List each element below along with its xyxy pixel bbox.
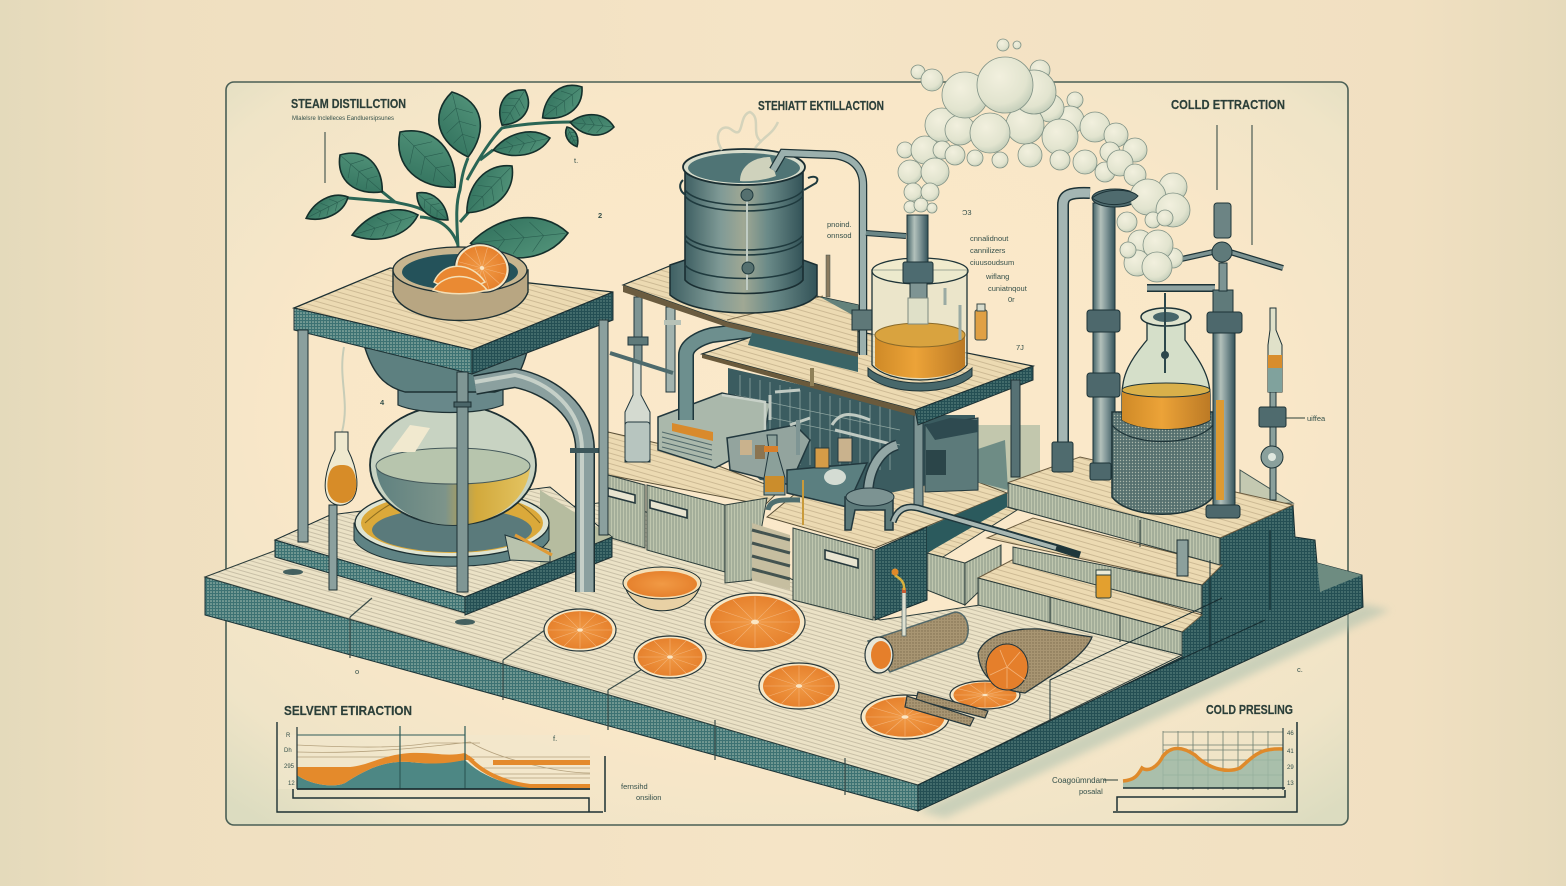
small figure labels: [355, 156, 1326, 743]
connecting pipe: [773, 153, 863, 355]
drain pipe: [893, 507, 1080, 555]
annotations near the jar: 0r: [1008, 295, 1015, 304]
pump: [845, 488, 894, 530]
heading: cold extraction: COLLD ETTRACTION: [1171, 97, 1285, 112]
heading: cold pressing: COLD PRESLING: [1206, 702, 1293, 717]
top step: [1007, 457, 1293, 565]
curved pipe: [868, 445, 897, 495]
chart notes: cold pressing: posalal: [1079, 787, 1103, 796]
support post: [914, 412, 923, 507]
large steel pot: [670, 149, 817, 313]
annotations near the jar: 7J: [1016, 343, 1024, 352]
callout leader lines: [325, 125, 1252, 245]
chart notes: solvent extraction: R: [286, 733, 291, 739]
control console: [658, 393, 770, 468]
annotations near the jar: wiflang: [985, 272, 1009, 281]
chart notes: solvent extraction: [284, 733, 661, 802]
low step: [978, 560, 1202, 655]
wall behind the machinery: [975, 425, 1040, 500]
small side block: [927, 505, 1017, 605]
stepped platform: stone steps: [927, 457, 1293, 655]
annotations near the jar: [827, 208, 1028, 352]
upper shelf: [623, 265, 858, 357]
steam collar on column: [1092, 190, 1138, 205]
thin left pipe: [1052, 193, 1090, 472]
left table with flask: [275, 268, 613, 625]
middle step: [987, 518, 1222, 613]
small figure labels: c.: [1297, 665, 1303, 674]
glass flask with oil: [1122, 288, 1215, 429]
small figure labels: 4: [380, 398, 385, 407]
panel: framed diagram area: [226, 82, 1348, 825]
speckled cylinder: [1112, 412, 1213, 514]
chart notes: solvent extraction: onsilion: [636, 793, 661, 802]
top ledge on teal side: [1317, 563, 1362, 592]
annotations near the jar: cnnalidnout: [970, 234, 1009, 243]
small vial: [975, 304, 987, 340]
side pipe: [475, 378, 585, 592]
side cabinet: [925, 418, 978, 492]
bottle on stand: [625, 360, 650, 462]
small flask: [325, 347, 357, 505]
orange bottle: [764, 435, 785, 495]
annotations near the jar: Ɔ3: [962, 208, 972, 217]
stems: [348, 122, 572, 247]
heading: solvent extraction: SELVENT ETIRACTION: [284, 703, 412, 718]
short post: [826, 255, 830, 297]
chart notes: cold pressing: 46: [1287, 731, 1294, 737]
rind strips: [905, 692, 988, 726]
thick column: [1087, 189, 1138, 480]
heating ring: [354, 489, 549, 566]
label line: [1286, 417, 1305, 419]
wisps of steam above the pot: [718, 112, 778, 150]
half slice: [623, 567, 701, 611]
table leg: [1011, 380, 1020, 477]
chart notes: cold pressing: 13: [1287, 781, 1294, 787]
small side column: [1259, 308, 1286, 500]
chart notes: solvent extraction: fernsihd: [621, 782, 648, 791]
orange slices on the platform: [544, 567, 1020, 739]
cone of rind: [978, 629, 1092, 693]
small teal side seams: [1050, 530, 1270, 720]
round flask: [370, 405, 536, 525]
glassware tray: [727, 390, 870, 485]
heading: steam distillation: STEAM DISTILLCTION: [291, 96, 406, 111]
burette column: [1177, 203, 1283, 518]
central stone blocks: [608, 432, 1008, 620]
upper tables: [623, 255, 1033, 477]
chart notes: solvent extraction: Dh: [284, 748, 292, 754]
annotations near the jar: cuniatnqout: [988, 284, 1028, 293]
annotations near the jar: ciuusoudsum: [970, 258, 1014, 267]
base platform: [205, 500, 1182, 811]
small figure labels: 2: [598, 211, 602, 220]
chart notes: solvent extraction: 12: [288, 781, 295, 787]
chart notes: cold pressing: 29: [1287, 765, 1294, 771]
tray with vials: [787, 430, 895, 525]
faucet: [768, 500, 800, 510]
bottom stand: [275, 487, 612, 625]
lower table: [702, 320, 1033, 425]
funnel bowl: [365, 348, 528, 392]
annotations near the jar: pnoind.: [827, 220, 852, 229]
right apparatus: [1052, 189, 1305, 518]
machinery under the table: [610, 297, 1080, 555]
cylindrical rind roll: [865, 612, 968, 673]
small figure labels: f.: [553, 734, 557, 743]
teal pipe: [686, 330, 752, 420]
small pipes near the bottle: [610, 297, 681, 392]
small orange notch: [505, 535, 550, 562]
chart: solvent extraction: [277, 722, 605, 812]
small figure labels: o: [355, 667, 359, 676]
chart notes: cold pressing: 41: [1287, 749, 1294, 755]
small figure labels: t.: [574, 156, 578, 165]
grey wedge by the column: [1240, 470, 1293, 505]
annotations near the jar: cannilizers: [970, 246, 1006, 255]
chart notes: cold pressing: [1052, 731, 1294, 796]
small jar: [1096, 570, 1111, 598]
chart notes: solvent extraction: 295: [284, 764, 295, 770]
stepped platform: right teal side: [918, 505, 1363, 811]
small figure labels: uiffea: [1307, 414, 1326, 423]
bowl with orange slices: [393, 238, 528, 320]
plant: [302, 77, 615, 263]
chart notes: cold pressing: Coagoümndam: [1052, 776, 1107, 785]
steam column: [903, 215, 933, 324]
caption: steam distillation: Mlalelsre Inclelleces Eandluersipsunes: [292, 115, 395, 122]
small post: [1177, 540, 1188, 576]
annotations near the jar: onnsod: [827, 231, 852, 240]
steam cloud bubbles: [897, 39, 1190, 282]
glass jar with oil: [868, 258, 972, 391]
heading: steam extraction: STEHIATT EKTILLACTION: [758, 98, 884, 113]
table top: [294, 268, 613, 374]
rod with orange tip: [892, 568, 906, 636]
chart: cold pressing: [1104, 722, 1297, 812]
table legs: [298, 320, 608, 592]
funnel collar: [398, 388, 503, 412]
